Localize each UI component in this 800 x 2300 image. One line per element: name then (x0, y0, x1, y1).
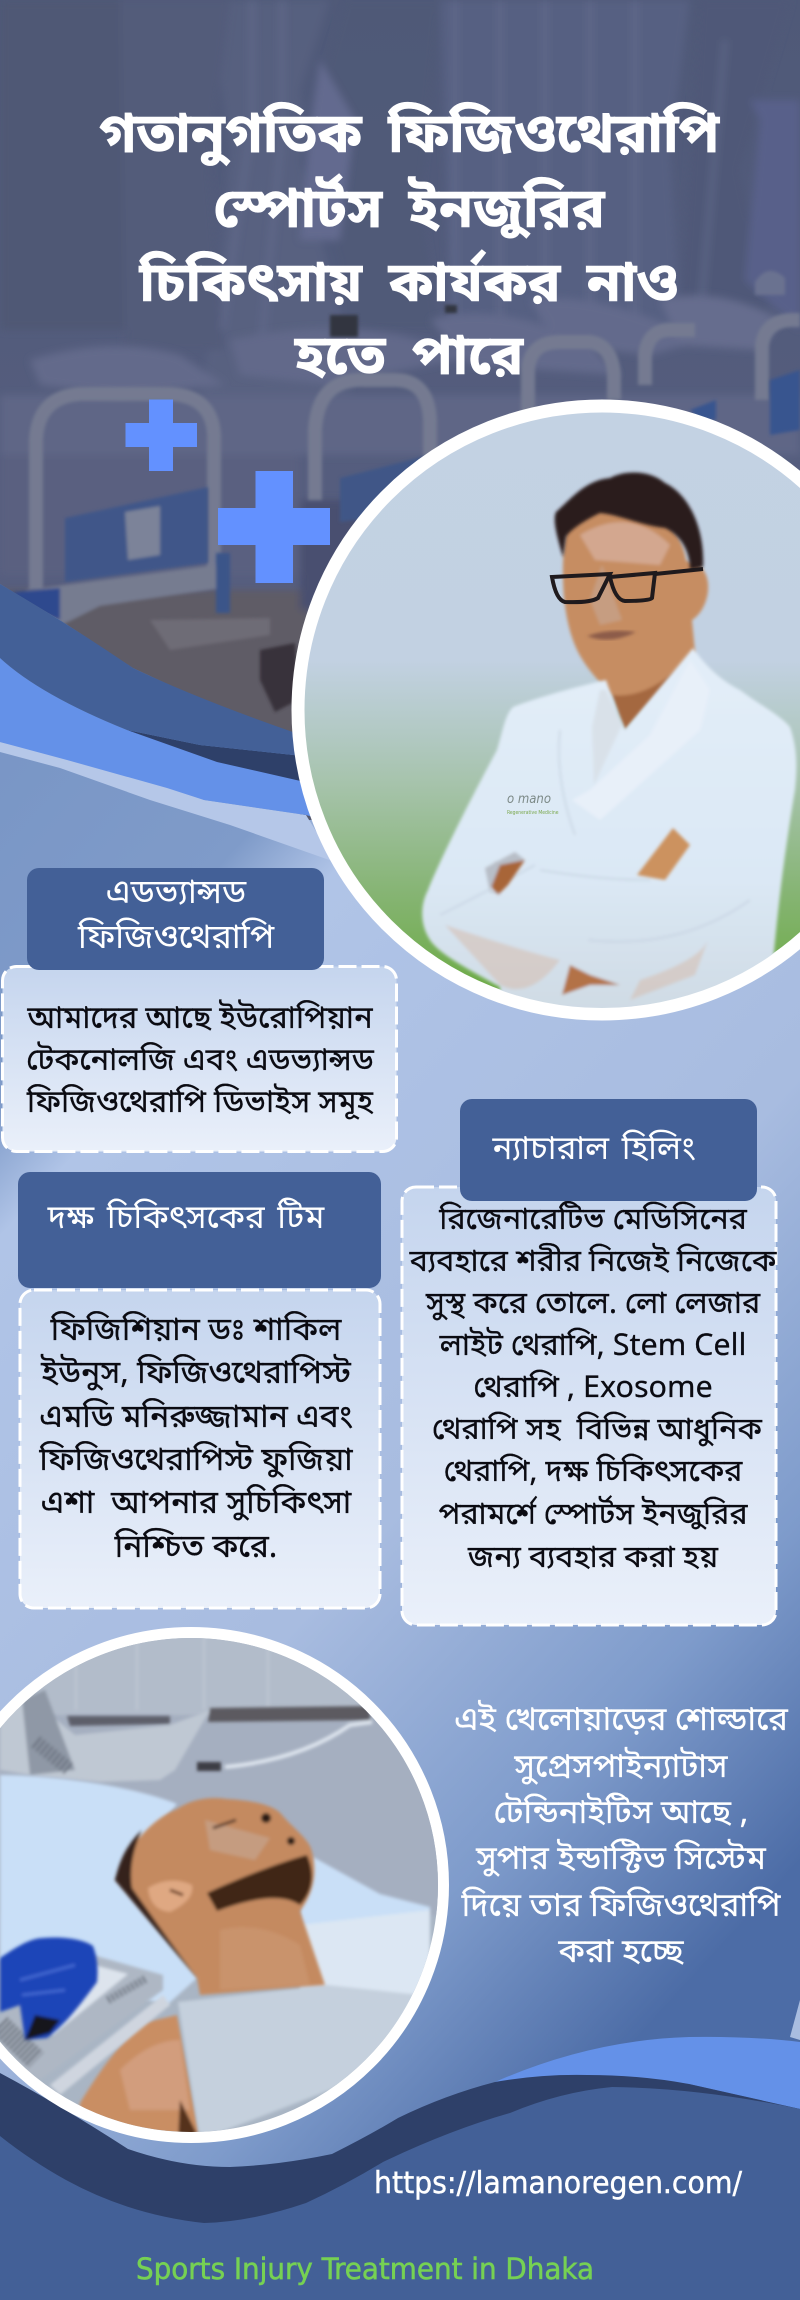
therapy machine (0, 1690, 372, 1782)
towel (178, 1985, 420, 2140)
doctor neck and face (563, 504, 708, 730)
panel heading (27, 868, 324, 970)
panel heading (18, 1172, 381, 1288)
photo: patient receiving therapy in circle (0, 1630, 450, 2140)
doctor white coat (422, 648, 796, 1040)
panel: expert doctors team (18, 1172, 381, 1608)
coat logo text (507, 796, 558, 815)
coat logo text: Regenerative Medicine (507, 810, 559, 816)
panel: natural healing (402, 1099, 777, 1625)
caption: patient description: করা হচ্ছে (557, 1933, 685, 1976)
patient shoulder (77, 2015, 200, 2140)
top-left waves (0, 584, 340, 862)
footer tagline: Sports Injury Treatment in Dhaka (136, 2252, 594, 2286)
panel body: পরামর্শে স্পোর্টস ইনজুরির (438, 1494, 748, 1537)
panel body: লাইট থেরাপি, Stem Cell (439, 1327, 746, 1368)
panel body: ফিজিশিয়ান ডঃ শাকিল (50, 1311, 342, 1354)
caption: patient description: এই খেলোয়াড়ের শোল্ডারে (454, 1699, 788, 1744)
caption: patient description: টেন্ডিনাইটিস আছে , (493, 1792, 749, 1837)
panel body: নিশ্চিত করে. (114, 1528, 277, 1571)
icon: small medical cross (126, 400, 197, 471)
panel heading: ফিজিওথেরাপি (77, 917, 275, 962)
panel body: ফিজিওথেরাপি ডিভাইস সমূহ (26, 1084, 374, 1125)
doctor hands (485, 828, 690, 895)
panel body: এমডি মনিরুজ্জামান এবং (39, 1398, 353, 1441)
icon: large medical cross (218, 471, 330, 583)
panel body: জন্য ব্যবহার করা হয় (467, 1540, 719, 1580)
website url: https://lamanoregen.com/ (374, 2166, 743, 2201)
doctor mouth (587, 631, 636, 640)
panel body: সুস্থ করে তোলে. লো লেজার (425, 1286, 761, 1326)
coat logo text: o mano (507, 792, 551, 807)
panel body: এশা আপনার সুচিকিৎসা (41, 1484, 352, 1527)
panel body (20, 1290, 380, 1608)
panel heading: ন্যাচারাল হিলিং (492, 1128, 696, 1173)
panel heading: দক্ষ চিকিৎসকের টিম (47, 1197, 325, 1242)
panel body (2, 966, 396, 1152)
panel: advanced physiotherapy (2, 868, 396, 1152)
doctor glasses (552, 569, 703, 602)
title: গতানুগতিক ফিজিওথেরাপি (99, 102, 721, 175)
panel body: আমাদের আছে ইউরোপিয়ান (26, 1000, 373, 1041)
sheets (0, 1774, 432, 2007)
photo: doctor portrait in circle (298, 406, 800, 1040)
caption: patient description: দিয়ে তার ফিজিওথেরাপি (460, 1885, 781, 1930)
title (99, 102, 721, 397)
panel body: ফিজিওথেরাপিস্ট ফুজিয়া (38, 1441, 353, 1484)
panel body: থেরাপি সহ বিভিন্ন আধুনিক (424, 1411, 762, 1452)
caption: patient description: সুপ্রেসপাইন্যাটাস (513, 1746, 728, 1791)
panel heading (460, 1099, 757, 1201)
bottom waves (0, 2000, 800, 2300)
panel body: রিজেনারেটিভ মেডিসিনের (438, 1201, 748, 1242)
handheld device (0, 1955, 170, 2095)
wall panels (0, 1630, 450, 1915)
title: চিকিৎসায় কার্যকর নাও (138, 250, 679, 324)
title: স্পোর্টস ইনজুরির (213, 173, 606, 250)
blue glove (0, 1937, 98, 2040)
background photo: hospital ward (0, 0, 800, 820)
panel body: ইউনুস, ফিজিওথেরাপিস্ট (40, 1354, 352, 1397)
panel heading: এডভ্যান্সড (106, 872, 247, 917)
panel body: টেকনোলজি এবং এডভ্যান্সড (26, 1042, 375, 1083)
caption: patient description (454, 1699, 788, 1976)
panel body: ব্যবহারে শরীর নিজেই নিজেকে (409, 1243, 777, 1284)
panel body (402, 1187, 777, 1625)
panel body: থেরাপি, দক্ষ চিকিৎসকের (444, 1453, 743, 1494)
caption: patient description: সুপার ইন্ডাক্টিভ সিস্টেম (475, 1838, 767, 1883)
panel body: থেরাপি , Exosome (473, 1369, 713, 1410)
title: হতে পারে (294, 325, 524, 397)
doctor hair (555, 473, 703, 570)
patient head and neck (115, 1798, 325, 1995)
